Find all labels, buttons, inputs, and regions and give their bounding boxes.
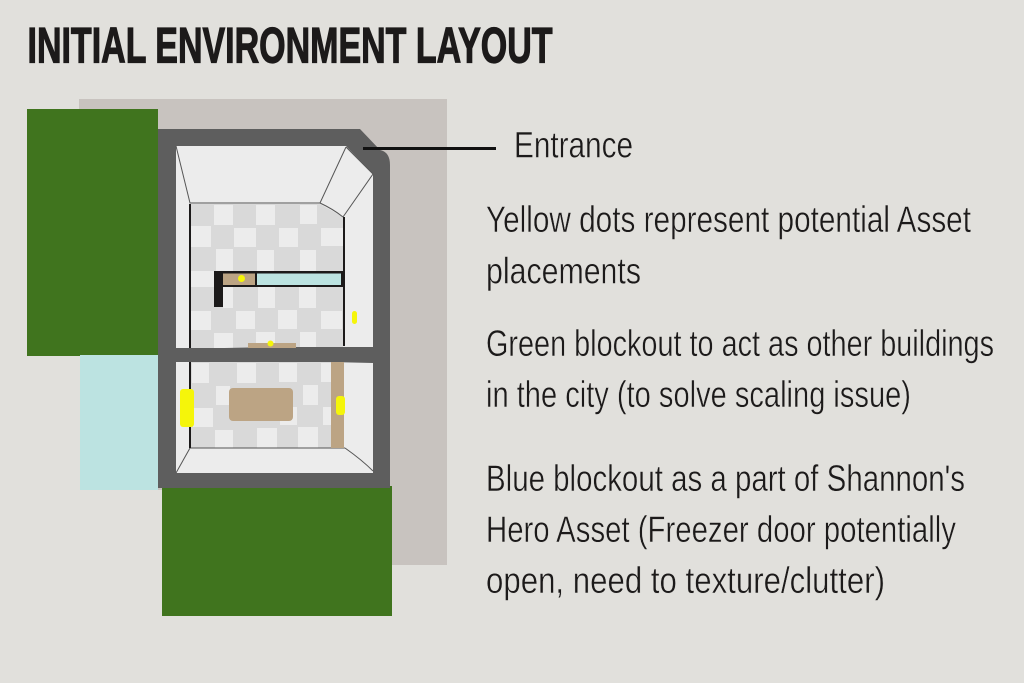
label: entrance: Entrance xyxy=(514,124,633,166)
wall perspective lines xyxy=(176,146,373,473)
brown strip xyxy=(331,362,344,448)
shelf counter xyxy=(214,271,344,307)
entrance pointer line xyxy=(363,147,496,150)
text block: yellow dots xyxy=(486,199,972,292)
text block: blue blockout xyxy=(486,458,965,601)
brown table xyxy=(248,343,296,348)
floor plan diagram xyxy=(27,99,447,616)
lower room floor xyxy=(190,362,343,448)
interior walls xyxy=(176,146,373,473)
green blockout: bottom building xyxy=(162,486,392,616)
green blockout: left building xyxy=(27,109,158,356)
yellow asset markers xyxy=(180,275,357,427)
upper room floor xyxy=(190,204,343,348)
title: INITIAL ENVIRONMENT LAYOUT xyxy=(28,18,552,74)
blue blockout: freezer xyxy=(80,355,158,490)
text block: blue blockout: open, need to texture/clutter) xyxy=(486,560,885,601)
text block: yellow dots: placements xyxy=(486,250,641,292)
divider wall xyxy=(176,347,373,363)
brown rug xyxy=(229,388,293,421)
text block: green blockout: in the city (to solve scaling issue) xyxy=(486,374,911,415)
black wall lines xyxy=(189,204,345,448)
text block: green blockout xyxy=(486,323,994,415)
gray backdrop xyxy=(79,99,447,565)
building outer wall xyxy=(158,129,390,488)
